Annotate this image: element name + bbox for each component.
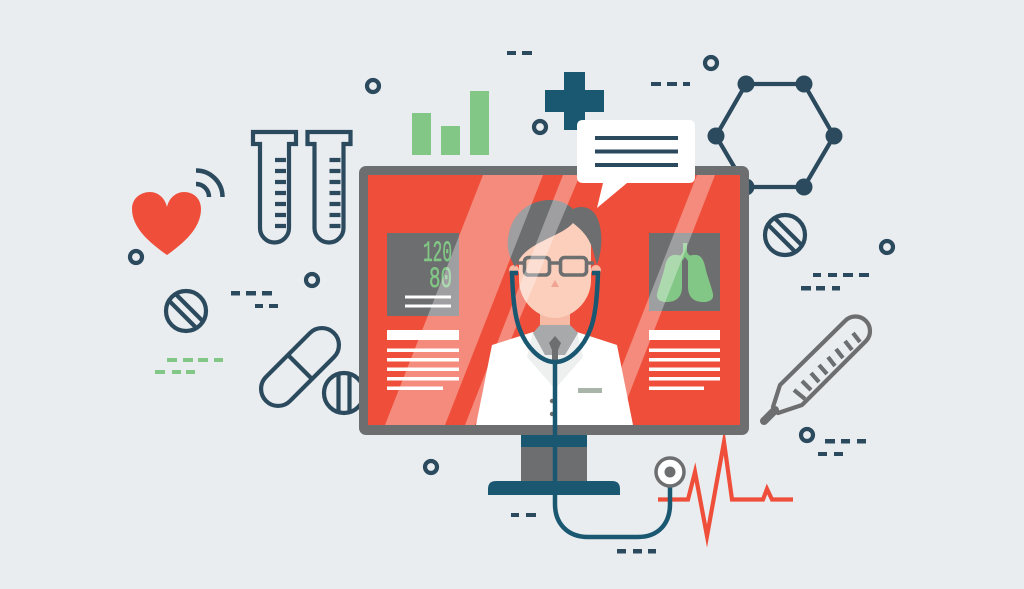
- text block: right notes: [649, 330, 720, 390]
- chest piece: [656, 458, 684, 486]
- bar chart: [412, 91, 489, 155]
- icon: molecule hexagon: [708, 76, 842, 196]
- nose: [551, 280, 559, 287]
- icon: medical cross: [545, 72, 604, 130]
- icon: thermometer: [764, 317, 870, 421]
- icon: test tubes: [253, 132, 350, 242]
- text block: left notes: [387, 330, 459, 390]
- coat pocket: [578, 388, 602, 393]
- panel: blood pressure readout: 120: [423, 237, 452, 271]
- ears: [509, 265, 519, 275]
- neck: [540, 305, 570, 333]
- icon: heart with wireless signal: [132, 170, 223, 255]
- icon: small rings: [130, 57, 893, 473]
- lapel shadow: [527, 332, 583, 389]
- glasses: [517, 258, 594, 275]
- speech bubble: [577, 120, 695, 208]
- doctor: [476, 200, 633, 425]
- dashes: right: [511, 273, 869, 554]
- face: [519, 215, 591, 318]
- monitor stand: [488, 435, 620, 495]
- ecg heartbeat line: [658, 442, 793, 536]
- dashes: navy left: [231, 291, 278, 308]
- icon: round pill left: [166, 291, 206, 331]
- coat buttons: [550, 399, 554, 403]
- stethoscope: [512, 273, 684, 537]
- screen glare: [385, 175, 715, 425]
- tie: [549, 336, 561, 360]
- panel: blood pressure readout: 80: [429, 263, 452, 297]
- hair: [508, 200, 601, 267]
- icon: round pill right: [765, 215, 805, 255]
- panel: lung scan: [649, 233, 720, 311]
- panel: blood pressure readout: [387, 233, 459, 316]
- shirt collar: [533, 325, 578, 355]
- screen: [368, 175, 740, 425]
- dashes: green left: [155, 358, 223, 374]
- icon: round pill beside monitor: [324, 373, 364, 413]
- monitor: [359, 166, 749, 435]
- lab coat: [476, 332, 633, 425]
- dashes: top: [507, 51, 690, 86]
- icon: capsule: [254, 321, 346, 413]
